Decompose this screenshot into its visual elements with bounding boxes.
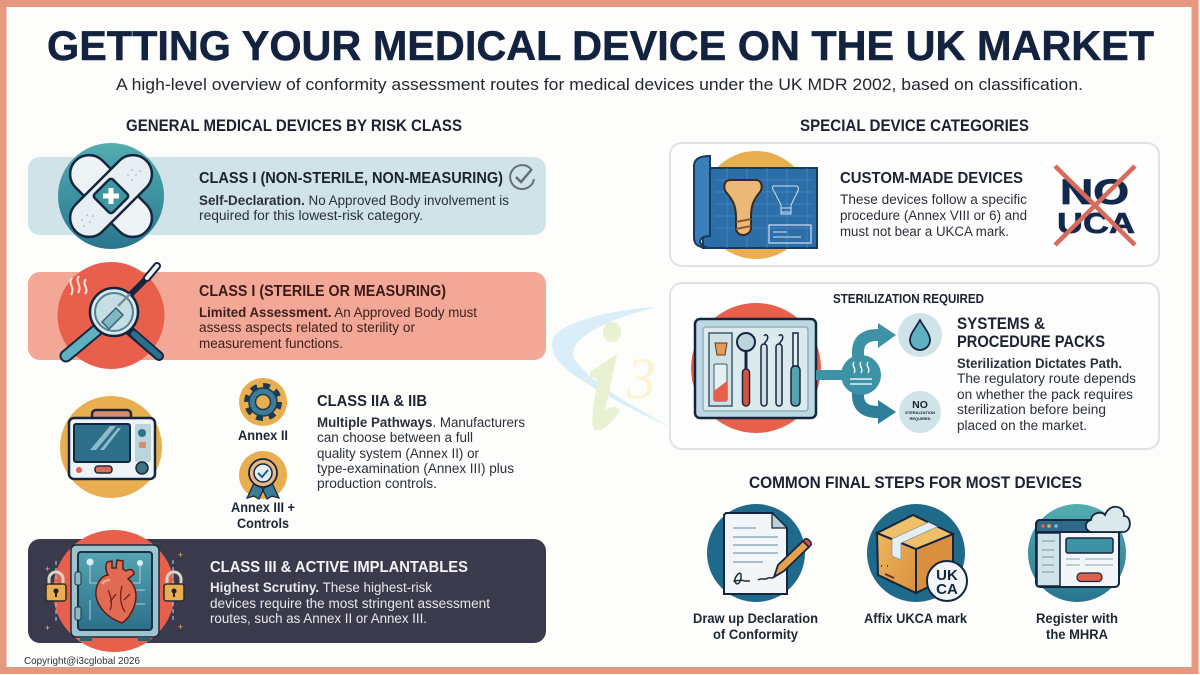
icon: gear xyxy=(239,378,287,426)
text: class I description xyxy=(199,193,509,223)
label: annex III plus controls: Controls xyxy=(237,516,289,531)
text: systems heading: SYSTEMS & xyxy=(957,315,1045,333)
text: class I description: required for this lowest-risk category. xyxy=(199,208,423,223)
heading: general medical devices: GENERAL MEDICAL DEVICES BY RISK CLASS xyxy=(126,117,462,135)
text: class III description xyxy=(210,580,490,626)
text: custom-made description xyxy=(840,192,1027,239)
icon: safe with heart: + xyxy=(178,622,183,632)
icon: box with UKCA badge: UK xyxy=(936,567,958,584)
icon: right padlock xyxy=(164,572,184,601)
text: systems heading xyxy=(957,315,1105,351)
icon: no UKCA mark: UCA xyxy=(1057,208,1135,240)
step: affix UKCA mark xyxy=(864,504,967,626)
text: systems heading: PROCEDURE PACKS xyxy=(957,333,1105,351)
text: class I sterile heading: CLASS I (STERILE OR MEASURING) xyxy=(199,283,446,300)
step: register with MHRA xyxy=(1028,504,1130,642)
text: class IIa description: Multiple Pathways. Manufacturers xyxy=(317,415,525,430)
icon: check circle xyxy=(510,165,534,189)
label: annex III plus controls xyxy=(231,500,295,531)
text: class I sterile description: measurement functions. xyxy=(199,336,343,351)
label: annex III plus controls: Annex III + xyxy=(231,500,295,515)
text: class III heading: CLASS III & ACTIVE IMPLANTABLES xyxy=(210,559,468,576)
text: class I heading: CLASS I (NON-STERILE, NON-MEASURING) xyxy=(199,170,503,187)
text: systems description: Sterilization Dictates Path. xyxy=(957,356,1122,371)
label: affix UKCA mark: Affix UKCA mark xyxy=(864,611,967,626)
icon: signed document xyxy=(707,504,811,602)
text: class III description: devices require the most stringent assessment xyxy=(210,596,490,611)
text: class III description: routes, such as Annex II or Annex III. xyxy=(210,611,427,626)
icon: no UKCA mark: NO xyxy=(1060,173,1129,212)
step: declaration of conformity xyxy=(693,504,818,642)
icon: instrument tray xyxy=(691,303,821,433)
text: systems description: The regulatory route depends xyxy=(957,371,1136,386)
watermark logo xyxy=(552,307,670,430)
text: class I description: Self-Declaration. No Approved Body involvement is xyxy=(199,193,509,208)
icon: water drop xyxy=(898,313,942,357)
icon: no sterilization required: NO xyxy=(912,399,928,411)
label: draw up declaration: of Conformity xyxy=(713,627,798,642)
icon: left padlock xyxy=(46,572,66,601)
text: custom-made heading: CUSTOM-MADE DEVICES xyxy=(840,170,1023,187)
text: class I sterile description: assess aspects related to sterility or xyxy=(199,320,416,335)
icon: safe with heart: + xyxy=(45,564,50,574)
panel: systems and procedure packs xyxy=(670,283,1159,449)
watermark logo: 3 xyxy=(626,346,656,411)
text: class IIa heading: CLASS IIA & IIB xyxy=(317,393,427,410)
icon: branching arrows xyxy=(816,323,896,424)
text: class IIa description: quality system (Annex II) or xyxy=(317,446,479,461)
text: custom-made description: procedure (Annex VIII or 6) and xyxy=(840,208,1027,223)
text: custom-made description: These devices follow a specific xyxy=(840,192,1027,207)
text: systems description: placed on the market. xyxy=(957,418,1087,433)
icon: magnifier with syringe xyxy=(58,262,164,369)
title: GETTING YOUR MEDICAL DEVICE ON THE UK MARKET xyxy=(47,22,1154,69)
icon: monitor device xyxy=(60,396,162,498)
label: register with MHRA: Register with xyxy=(1036,611,1118,626)
icon: safe with heart xyxy=(45,530,184,652)
icon: box with UKCA badge: CA xyxy=(936,581,958,598)
panel: class III xyxy=(28,530,546,652)
text: systems description: sterilization before being xyxy=(957,402,1106,417)
text: class III description: Highest Scrutiny. These highest-risk xyxy=(210,580,432,595)
text: systems description xyxy=(957,356,1136,433)
label: draw up declaration xyxy=(693,611,818,642)
text: class IIa description: can choose between a full xyxy=(317,430,473,445)
panel: class I sterile xyxy=(28,262,546,369)
icon: safe with heart: + xyxy=(45,623,50,633)
heading: common final steps: COMMON FINAL STEPS FOR MOST DEVICES xyxy=(749,474,1082,492)
icon: no sterilization required: STERILIZATION xyxy=(905,410,935,415)
icon: no UKCA mark xyxy=(1055,166,1135,245)
text: class IIa description: production controls. xyxy=(317,476,437,491)
icon: box with UKCA badge xyxy=(867,504,967,602)
text: class IIa description xyxy=(317,415,525,491)
icon: no sterilization required: REQUIRED xyxy=(909,416,931,421)
label: sterilization required: STERILIZATION REQUIRED xyxy=(833,292,984,306)
label: register with MHRA: the MHRA xyxy=(1046,627,1108,642)
heading: special device categories: SPECIAL DEVICE CATEGORIES xyxy=(800,117,1029,135)
panel: class IIa and IIb xyxy=(60,378,525,531)
copyright: Copyright@i3cglobal 2026 xyxy=(24,655,140,667)
panel: class I non-sterile xyxy=(28,143,546,249)
label: register with MHRA xyxy=(1036,611,1118,642)
subtitle: A high-level overview of conformity assessment routes for medical devices under the UK MDR 2002, based on classification. xyxy=(116,75,1083,94)
icon: award badge xyxy=(239,451,287,499)
panel: custom-made devices xyxy=(670,143,1159,266)
icon: no sterilization required xyxy=(899,391,941,433)
icon: blueprint xyxy=(694,151,817,259)
text: custom-made description: must not bear a UKCA mark. xyxy=(840,224,1009,239)
text: class I sterile description: Limited Assessment. An Approved Body must xyxy=(199,305,477,320)
text: class IIa description: type-examination (Annex III) plus xyxy=(317,461,514,476)
label: annex II: Annex II xyxy=(238,428,288,443)
label: draw up declaration: Draw up Declaration xyxy=(693,611,818,626)
text: class I sterile description xyxy=(199,305,477,351)
icon: bandage xyxy=(58,143,164,249)
icon: browser and cloud xyxy=(1028,504,1130,602)
icon: safe with heart: + xyxy=(178,550,183,560)
text: systems description: on whether the pack requires xyxy=(957,387,1133,402)
